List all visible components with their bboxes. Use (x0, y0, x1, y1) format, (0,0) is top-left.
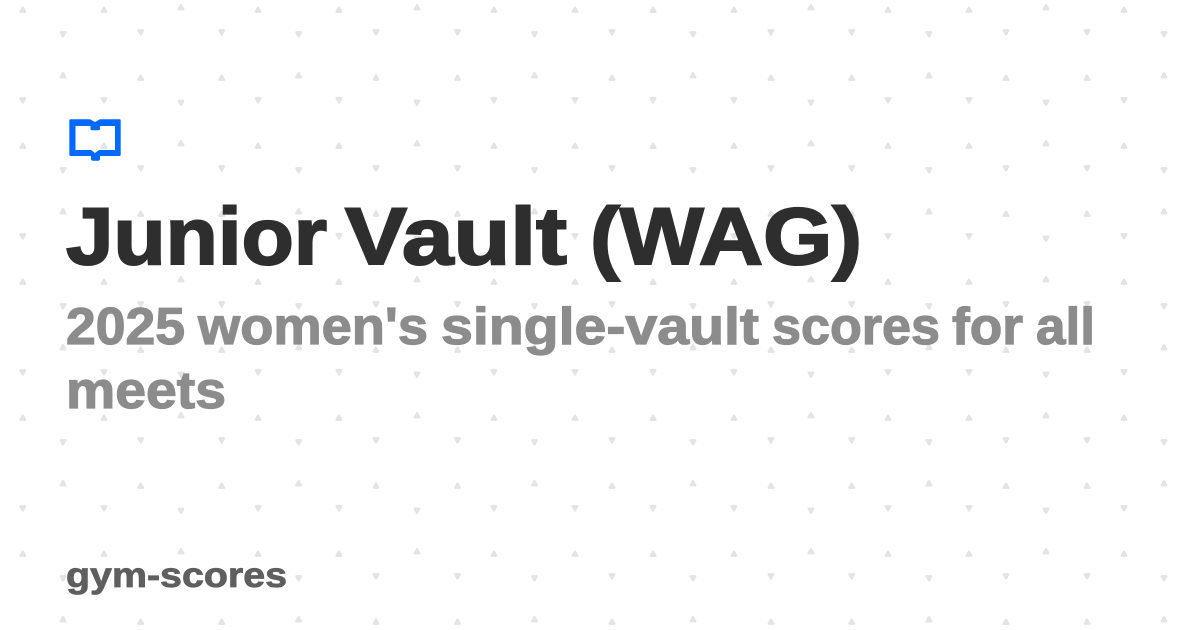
subtitle: single-vault (441, 298, 759, 356)
subtitle: women's (197, 298, 428, 356)
subtitle: meets (66, 362, 226, 420)
icon: open book logo (69, 119, 121, 161)
title: Vault (345, 192, 567, 282)
subtitle: for (952, 298, 1023, 356)
footer label: gym-scores: gym-scores (66, 556, 287, 595)
subtitle: scores (772, 298, 940, 356)
title: (WAG) (590, 192, 862, 282)
subtitle (66, 298, 1095, 420)
subtitle: all (1036, 298, 1095, 356)
subtitle: 2025 (66, 298, 185, 356)
title: Junior (66, 192, 327, 282)
